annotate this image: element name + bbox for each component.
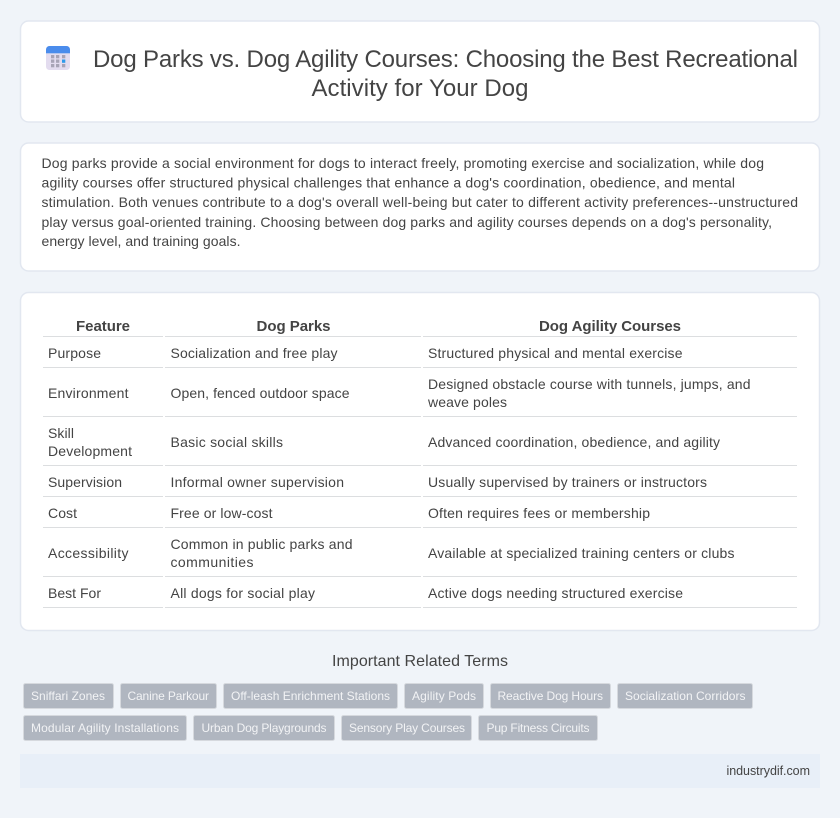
table header row [76, 318, 681, 335]
footer source: industrydif.com [726, 764, 810, 778]
tag: Sensory Play Courses [349, 721, 465, 735]
intro paragraph: Dog parks provide a social environment for dogs to interact freely, promoting exercise and socialization, while dog [42, 155, 764, 171]
row: Best For: Active dogs needing structured exercise [428, 585, 683, 601]
row: Supervision: Usually supervised by trainers or instructors [428, 474, 707, 490]
panel: introduction text [20, 143, 820, 271]
row: Skill Development: Basic social skills [170, 434, 283, 450]
tag [24, 684, 114, 708]
row: Purpose: Structured physical and mental exercise [428, 345, 683, 361]
tag: Canine Parkour [128, 689, 209, 703]
tag [224, 684, 398, 708]
tag [342, 716, 472, 740]
table header row: Dog Agility Courses [539, 318, 681, 335]
row: Accessibility [48, 536, 734, 570]
intro paragraph: stimulation. Both venues contribute to a dog's overall well-being but cater to different activity preferences--unstructured [42, 194, 798, 210]
row: Cost [48, 505, 650, 521]
tag: Reactive Dog Hours [498, 689, 603, 703]
row: Cost: Cost [48, 505, 77, 521]
row: Supervision: Supervision [48, 474, 122, 490]
row: Accessibility: Common in public parks and [170, 536, 352, 552]
tag: Pup Fitness Circuits [486, 721, 590, 735]
tag [120, 684, 216, 708]
row: Environment: Environment [48, 385, 129, 401]
intro paragraph [42, 155, 798, 249]
tag: Sniffari Zones [31, 689, 105, 703]
panel: title header [20, 21, 820, 122]
tag [478, 716, 598, 740]
row: Best For: All dogs for social play [170, 585, 315, 601]
tag [194, 716, 334, 740]
row: Skill Development: Skill [48, 425, 74, 441]
icon: calendar [46, 46, 70, 70]
row: Purpose: Socialization and free play [170, 345, 338, 361]
row: Supervision: Informal owner supervision [170, 474, 344, 490]
table header row: Dog Parks [256, 318, 330, 335]
title: Activity for Your Dog [312, 75, 528, 102]
row: Purpose [48, 345, 683, 361]
row: Skill Development: Advanced coordination, obedience, and agility [428, 434, 720, 450]
row: Environment: Designed obstacle course with tunnels, jumps, and [428, 376, 750, 392]
row: Best For: Best For [48, 585, 101, 601]
tag: Off-leash Enrichment Stations [231, 689, 390, 703]
row: Cost: Free or low-cost [170, 505, 273, 521]
intro paragraph: energy level, and training goals. [42, 233, 240, 249]
panel: comparison table [20, 292, 820, 630]
row: Environment [48, 376, 750, 410]
row: Accessibility: Available at specialized training centers or clubs [428, 545, 734, 561]
tag: Urban Dog Playgrounds [202, 721, 326, 735]
row: Purpose: Purpose [48, 345, 101, 361]
intro paragraph: play versus goal-oriented training. Choosing between dog parks and agility courses depends on a dog's personality, [42, 214, 772, 230]
intro paragraph: agility courses offer structured physical challenges that enhance a dog's coordination, obedience, and mental [42, 174, 735, 190]
tag: Agility Pods [412, 689, 476, 703]
row: Skill Development: Development [48, 443, 132, 459]
row: Best For [48, 585, 683, 601]
title [93, 46, 798, 102]
row: Skill Development [48, 425, 720, 459]
row: Accessibility: Accessibility [48, 545, 128, 561]
tag: Modular Agility Installations [31, 721, 179, 735]
row: Environment: Open, fenced outdoor space [170, 385, 350, 401]
tags: related terms [24, 684, 752, 740]
row: Cost: Often requires fees or membership [428, 505, 650, 521]
tag: Socialization Corridors [625, 689, 746, 703]
tag [24, 716, 186, 740]
title: Dog Parks vs. Dog Agility Courses: Choosing the Best Recreational [93, 46, 798, 73]
row: Accessibility: communities [170, 554, 254, 570]
tag [618, 684, 752, 708]
tag [490, 684, 610, 708]
footer bar [20, 754, 820, 788]
table header row: Feature [76, 318, 130, 335]
tag [404, 684, 484, 708]
row: Supervision [48, 474, 707, 490]
row: Environment: weave poles [427, 394, 507, 410]
heading: related terms: Important Related Terms [332, 653, 508, 670]
